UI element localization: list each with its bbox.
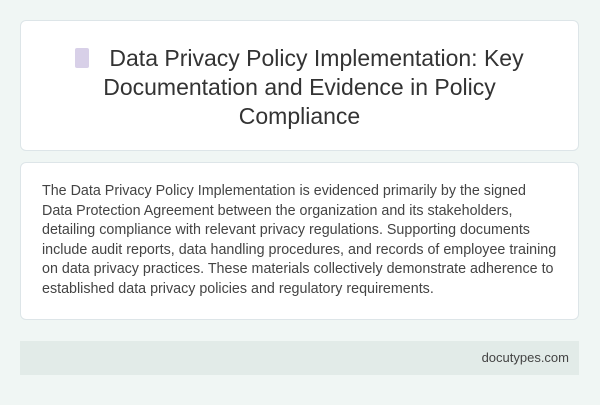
- text block: established data privacy policies and regulatory requirements.: [42, 280, 434, 296]
- icon: document: [75, 48, 89, 68]
- text block: include audit reports, data handling procedures, and records of employee training: [42, 242, 556, 258]
- text block: Data Protection Agreement between the organization and its stakeholders,: [42, 202, 512, 218]
- title: Data Privacy Policy Implementation: Key Documentation and Evidence in Policy Compliance: [103, 45, 524, 129]
- footer: docutypes.com: [482, 350, 569, 365]
- text block: [42, 183, 556, 296]
- text block: detailing compliance with relevant privacy regulations. Supporting documents: [42, 222, 530, 238]
- text block: on data privacy practices. These materials collectively demonstrate adherence to: [42, 261, 554, 277]
- footer: [20, 341, 579, 375]
- text block: The Data Privacy Policy Implementation is evidenced primarily by the signed: [42, 183, 526, 199]
- panel: description: [20, 162, 579, 320]
- panel: title: [20, 20, 579, 151]
